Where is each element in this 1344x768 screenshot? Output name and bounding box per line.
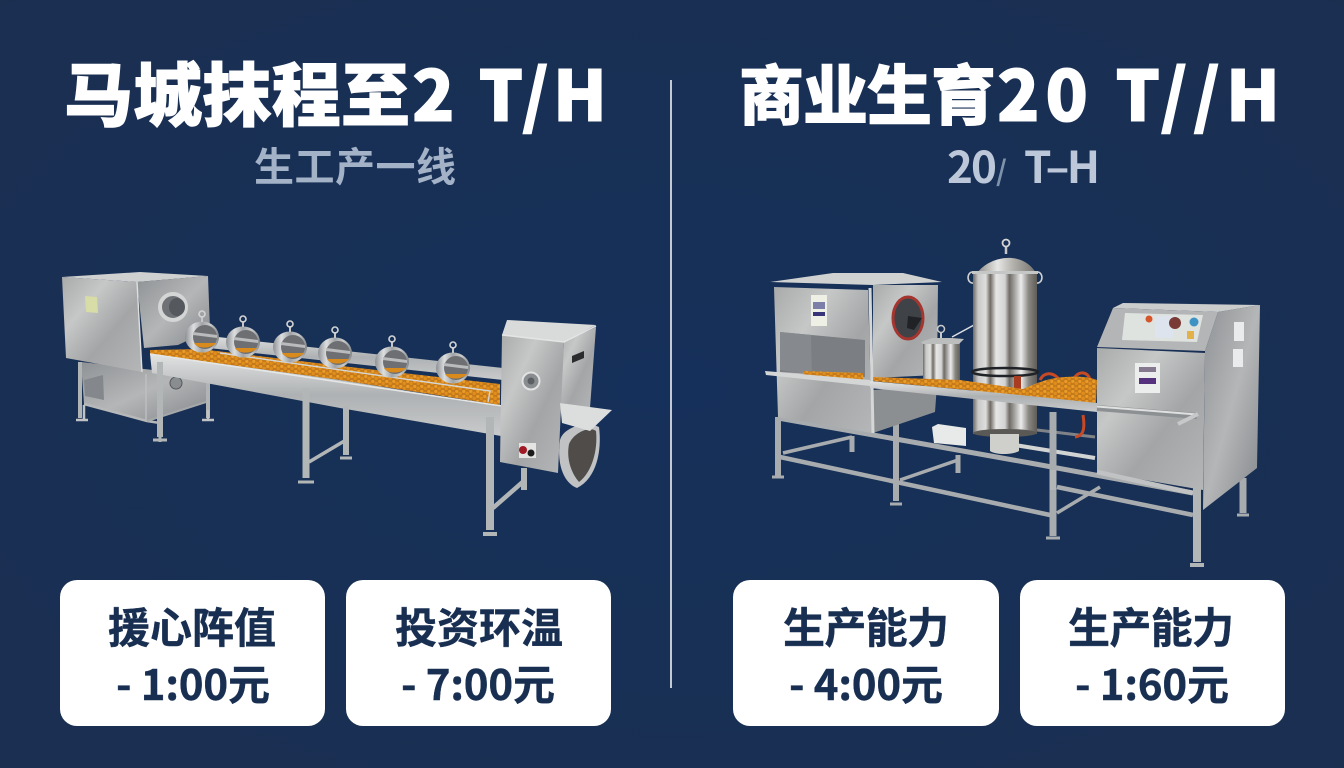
- card: right 2: 生产能力: [1068, 595, 1234, 656]
- left cabinet: [770, 273, 942, 433]
- title: left: 马城抹程至: [64, 40, 410, 140]
- lower housing: [76, 362, 214, 423]
- main rail: [765, 371, 1198, 424]
- white tray box: [932, 424, 966, 446]
- legs: [153, 362, 525, 534]
- discharge chute: [559, 403, 612, 488]
- card: right 1: 生产能力: [783, 595, 949, 656]
- title: right: 商业生育: [739, 44, 996, 138]
- title: left: [64, 40, 607, 142]
- big column: [968, 240, 1042, 454]
- subtitle: right: 20: [947, 132, 997, 196]
- subtitle: right: T–H: [1024, 132, 1100, 196]
- end cabinet: [500, 320, 596, 473]
- small pot: [921, 325, 974, 382]
- card: left 1: - 1:00元: [116, 652, 270, 713]
- card: left 2: - 7:00元: [401, 652, 555, 713]
- card: left 2: 投资环温: [395, 595, 563, 656]
- rings: [185, 311, 219, 352]
- conveyor inner tray: [220, 353, 490, 402]
- upper box: [62, 272, 210, 372]
- rear rail: [190, 334, 503, 380]
- subtitle: right: [947, 132, 1100, 196]
- title: right: [739, 41, 1280, 142]
- card: left 1: 援心阵值: [108, 595, 276, 656]
- machine: commercial production line: [765, 240, 1260, 565]
- card: right 1: [733, 580, 999, 726]
- title: left: 2 T/H: [412, 41, 607, 142]
- front frame: [1053, 470, 1204, 565]
- card: right 1: - 4:00元: [789, 652, 943, 713]
- card: right 2: - 1:60元: [1075, 652, 1229, 713]
- food trays: [803, 371, 1097, 403]
- subtitle: left: 生工产一线: [254, 135, 456, 193]
- subtitle: right: /: [996, 150, 1007, 190]
- hoses: [1040, 373, 1090, 437]
- title: right: 20 T//H: [997, 41, 1280, 142]
- conveyor trough: [150, 354, 502, 436]
- machine: small production line: [62, 272, 612, 534]
- divider: [670, 80, 672, 688]
- card: left 1: [60, 580, 325, 726]
- card: right 2: [1020, 580, 1285, 726]
- card: left 2: [346, 580, 611, 726]
- conveyor food: [150, 349, 500, 405]
- frame: [772, 392, 1249, 538]
- right cabinet: [1097, 303, 1260, 510]
